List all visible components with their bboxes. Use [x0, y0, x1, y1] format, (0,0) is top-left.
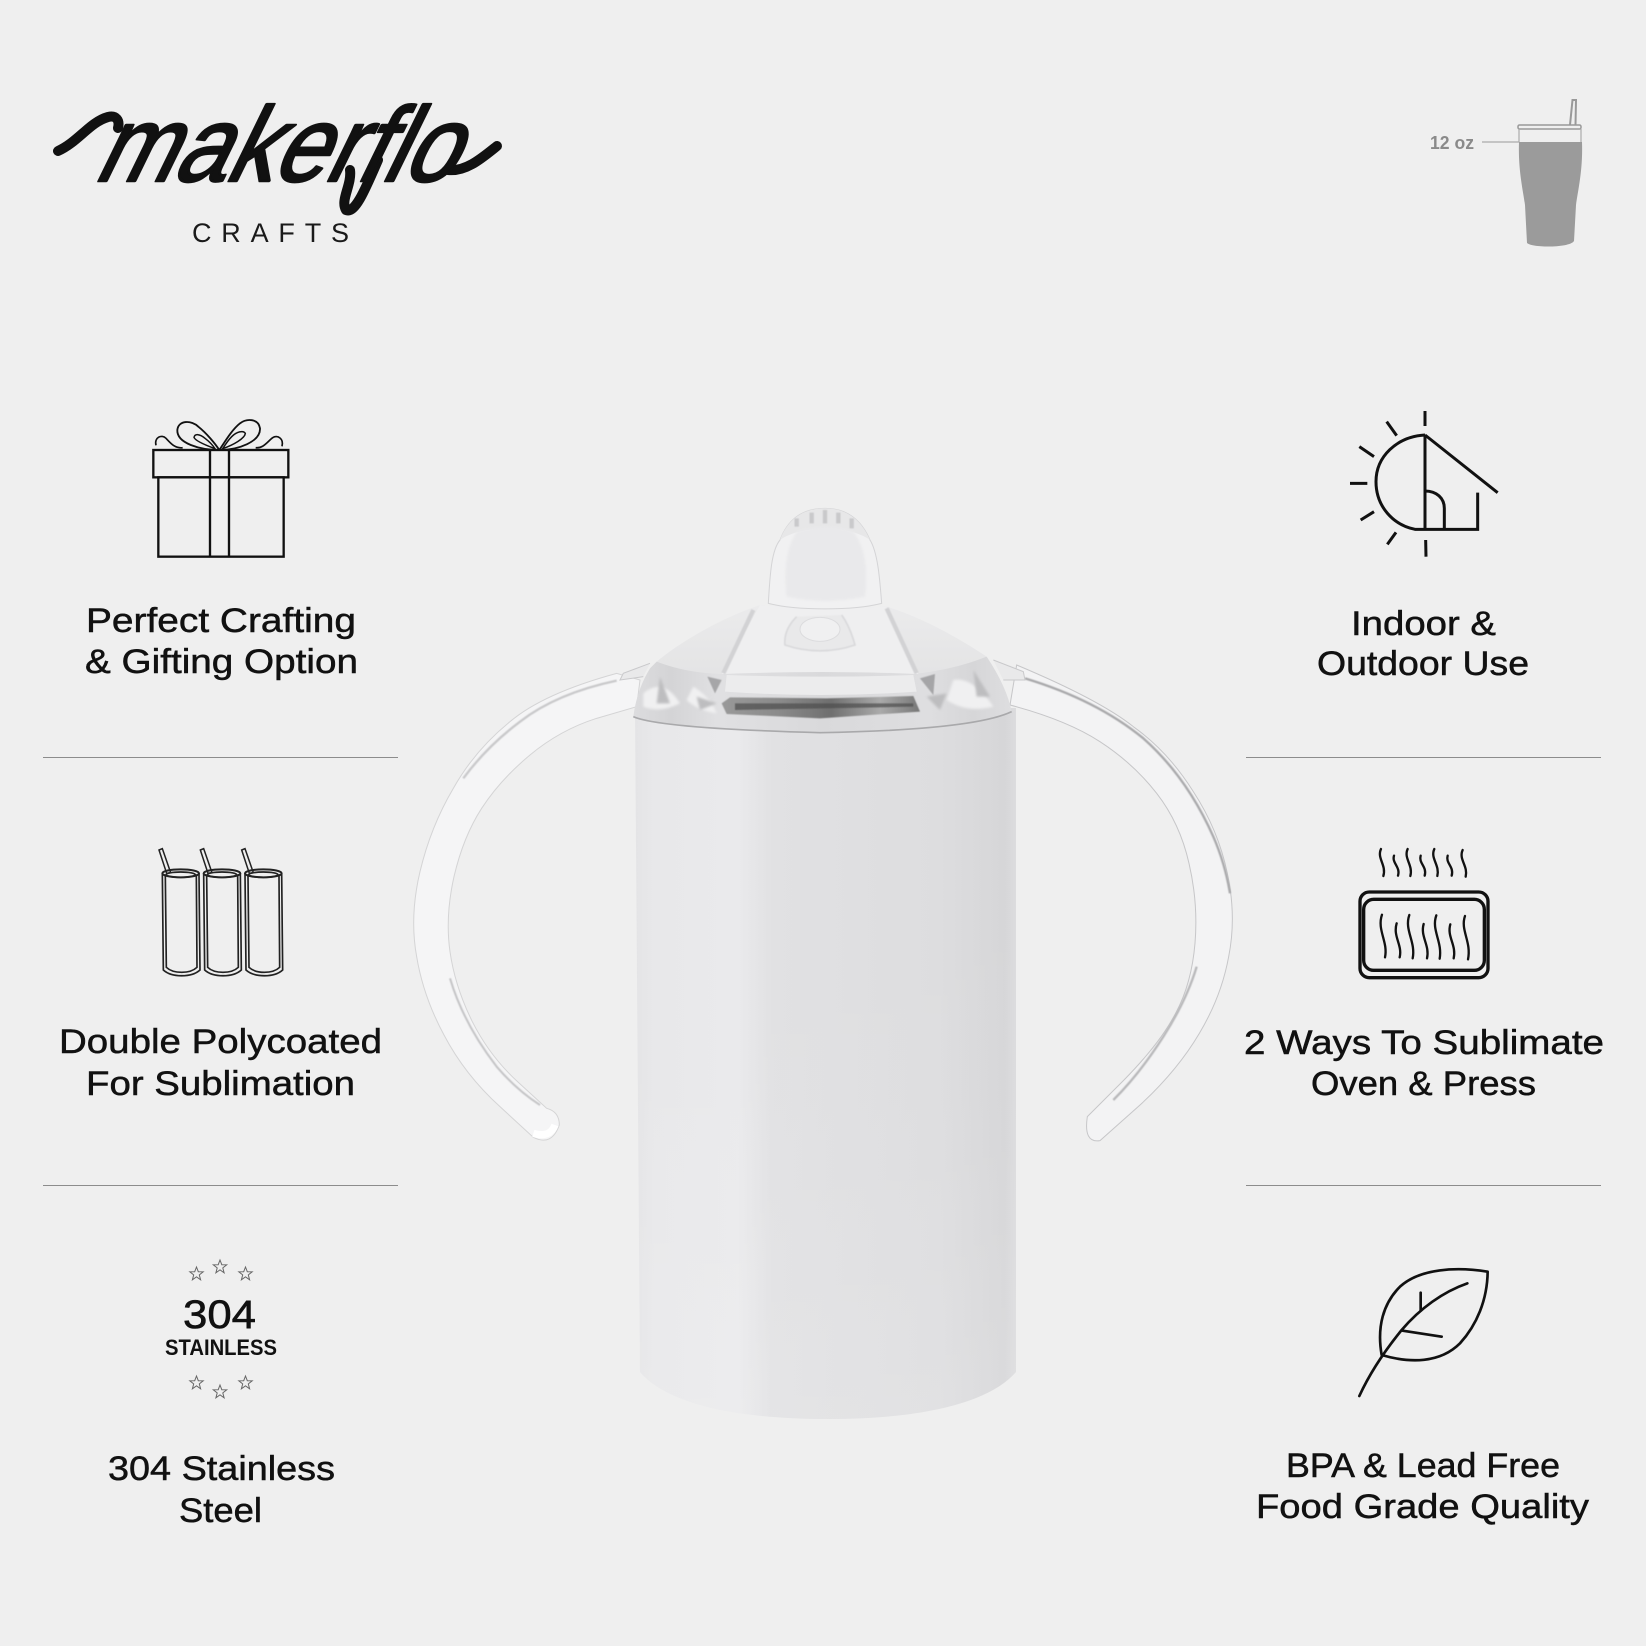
feature text: 2 Ways To Sublimate — [1244, 1024, 1604, 1062]
icon: leaf — [1359, 1269, 1488, 1396]
feature text — [1317, 605, 1529, 683]
feature text — [108, 1450, 335, 1530]
feature text: Double Polycoated — [59, 1023, 382, 1061]
feature text: Oven & Press — [1311, 1065, 1536, 1103]
tagline: crafts: CRAFTS — [192, 218, 349, 248]
product photo: sippy cup — [414, 508, 1232, 1419]
feature text: Outdoor Use — [1317, 645, 1529, 683]
icon: 304 stainless badge: 304 — [183, 1293, 256, 1337]
panel: indoor outdoor feature — [1317, 411, 1529, 683]
feature text — [1256, 1447, 1590, 1526]
panel: sublimation methods feature — [1244, 849, 1604, 1103]
cup lid — [620, 508, 1025, 733]
feature text: Food Grade Quality — [1256, 1488, 1590, 1526]
feature text: & Gifting Option — [85, 643, 358, 681]
panel: food grade feature — [1256, 1269, 1590, 1526]
icon: 304 stainless badge — [165, 1260, 277, 1398]
icon: sun and house — [1350, 411, 1498, 557]
capacity label: 12 oz — [1430, 133, 1474, 153]
capacity tumbler icon — [1482, 100, 1582, 247]
panel: polycoat feature — [59, 849, 382, 1103]
logo: makerflo crafts — [58, 86, 499, 248]
icon: oven tray with heat — [1360, 849, 1488, 978]
panel: gifting feature — [85, 420, 358, 681]
feature text: Steel — [179, 1492, 262, 1530]
feature text — [85, 602, 358, 681]
icon: gift box — [153, 420, 288, 557]
logo swash strokes — [58, 117, 497, 210]
feature text: 304 Stainless — [108, 1450, 335, 1488]
panel: stainless feature — [108, 1260, 335, 1530]
feature text: For Sublimation — [86, 1065, 355, 1103]
left handle — [414, 673, 640, 1140]
icon: 304 stainless badge: STAINLESS — [165, 1335, 277, 1360]
feature text: Perfect Crafting — [86, 602, 356, 640]
cup body — [635, 708, 1016, 1419]
capacity indicator: 12 oz — [1430, 100, 1582, 247]
feature text: BPA & Lead Free — [1286, 1447, 1560, 1485]
wordmark: makerflo — [81, 86, 499, 204]
icon: three tumblers — [159, 849, 283, 976]
feature text — [59, 1023, 382, 1103]
right handle — [1010, 665, 1232, 1141]
feature text: Indoor & — [1351, 605, 1496, 643]
feature text — [1244, 1024, 1604, 1103]
